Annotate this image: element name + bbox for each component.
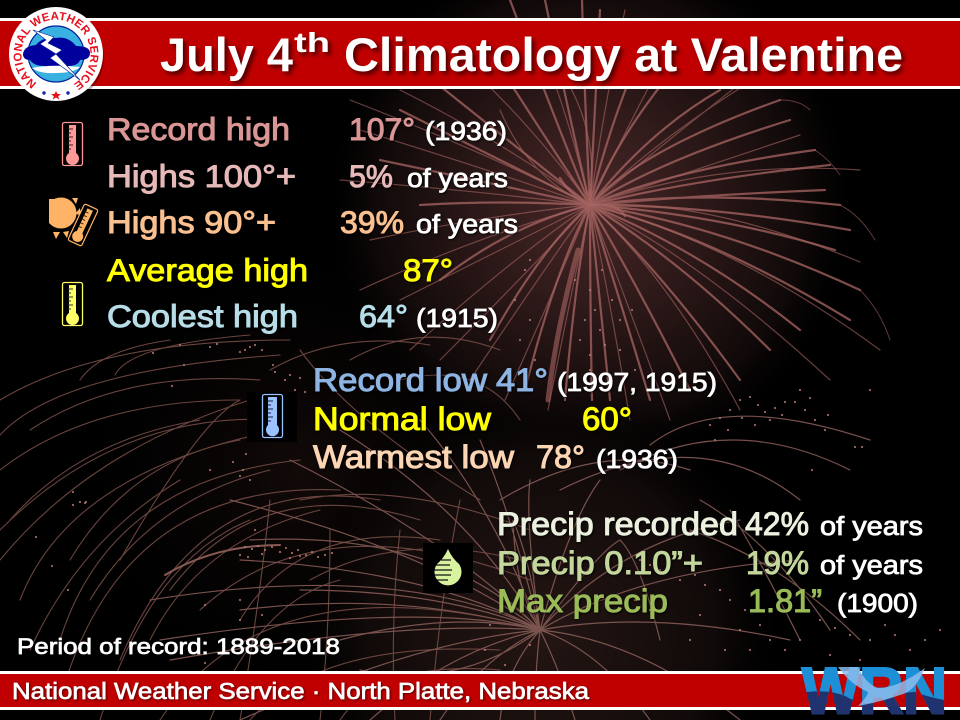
row: highs 100+: of years (407, 165, 508, 193)
row: average high: 87° (403, 252, 453, 288)
panel: precipitation (497, 506, 923, 619)
row: precip 0.10+: Precip 0.10”+ (497, 545, 703, 581)
row: record high: Record high (107, 111, 290, 147)
title: Climatology at Valentine (344, 28, 903, 81)
period of record note: Period of record: 1889-2018 (17, 634, 340, 659)
row: highs 90+: Highs 90°+ (107, 204, 276, 240)
row: warmest low (313, 439, 678, 475)
row: highs 100+ (107, 158, 508, 194)
row: max precip: 1.81” (748, 583, 822, 619)
row: record low (313, 362, 717, 398)
icon: sun and thermometer (46, 198, 98, 248)
row: max precip: Max precip (497, 583, 668, 619)
icon: WRN logo (800, 667, 944, 714)
row: highs 90+: 39% (340, 204, 404, 240)
row: highs 90+: of years (416, 211, 518, 239)
firework sparks: dots (36, 260, 940, 665)
row: coolest high: 64° (359, 298, 408, 334)
row: precip recorded: of years (820, 513, 923, 541)
row: precip 0.10+ (497, 545, 923, 581)
row: max precip: (1900) (837, 590, 918, 618)
row: record low: Record low (313, 362, 488, 398)
row: coolest high: Coolest high (107, 298, 298, 334)
row: precip recorded (497, 506, 923, 542)
icon: red thermometer (47, 120, 97, 170)
row: precip 0.10+: of years (820, 552, 923, 580)
row: warmest low: (1936) (596, 446, 678, 474)
row: record high (107, 111, 507, 147)
row: normal low: Normal low (313, 401, 492, 437)
row: precip recorded: 42% (745, 506, 809, 542)
row: normal low (313, 401, 632, 437)
firework burst: upper centre (340, 0, 890, 420)
row: record low: (1997, 1915) (557, 369, 717, 397)
icon: yellow thermometer (47, 280, 97, 330)
row: max precip (497, 583, 918, 619)
row: highs 100+: Highs 100°+ (107, 158, 296, 194)
footer banner (0, 671, 960, 710)
icon: NWS logo: NATIONAL WEATHER SERVICE (14, 12, 98, 90)
header banner (0, 18, 960, 89)
icon: blue thermometer (247, 392, 297, 442)
row: average high (107, 252, 453, 288)
firework burst: lower centre (150, 416, 870, 720)
row: normal low: 60° (582, 401, 632, 437)
panel: daily highs (107, 111, 518, 334)
title: th (294, 27, 330, 58)
row: record high: 107° (349, 111, 415, 147)
icon: water drop (423, 543, 473, 593)
row: precip 0.10+: 19% (746, 545, 809, 581)
row: highs 90+ (107, 204, 518, 240)
row: precip recorded: Precip recorded (497, 506, 738, 542)
row: warmest low: 78° (536, 439, 585, 475)
title: July 4 (160, 28, 293, 81)
row: coolest high: (1915) (416, 305, 498, 333)
firework burst: lower left arcs (0, 335, 530, 720)
row: average high: Average high (107, 252, 308, 288)
panel: daily lows (313, 362, 717, 475)
row: warmest low: Warmest low (313, 439, 515, 475)
row: record high: (1936) (425, 118, 507, 146)
row: coolest high (107, 298, 498, 334)
row: record low: 41° (496, 362, 548, 398)
footer text: National Weather Service · North Platte, Nebraska (12, 678, 589, 704)
row: highs 100+: 5% (349, 158, 393, 194)
